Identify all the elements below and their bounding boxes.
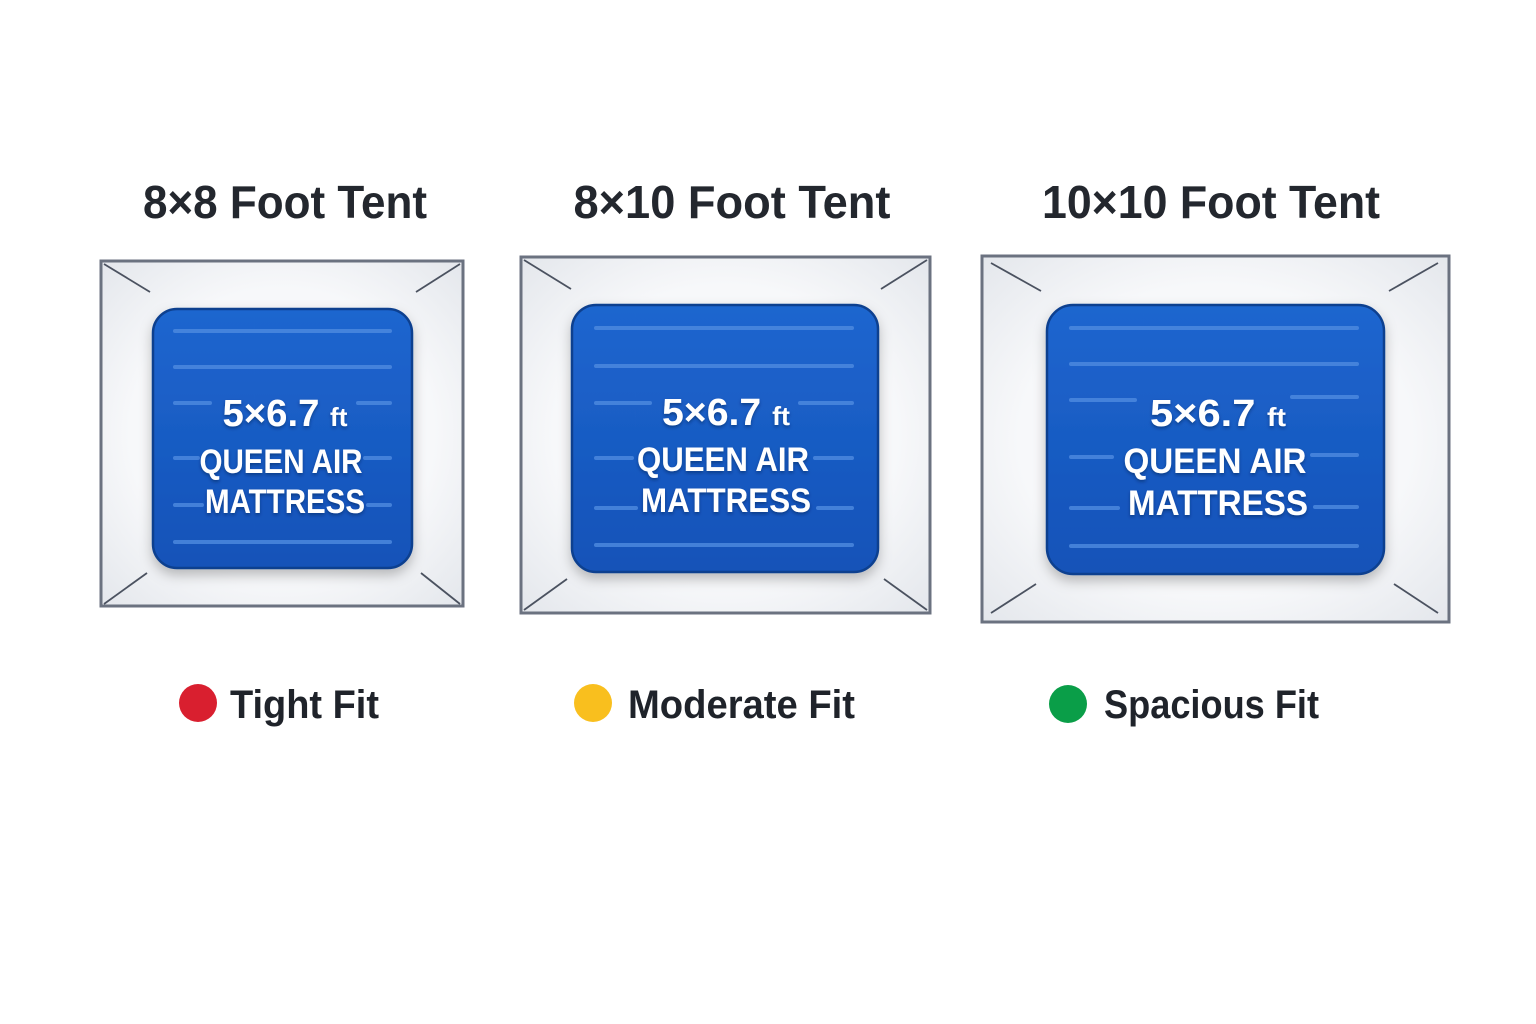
mattress bbox=[153, 309, 412, 568]
panel: 10x10 tent bbox=[982, 256, 1449, 622]
legend: spacious fit: Spacious Fit bbox=[1104, 683, 1319, 727]
legend: tight fit: Tight Fit bbox=[230, 683, 379, 727]
mattress: QUEEN AIR bbox=[637, 441, 809, 479]
mattress: MATTRESS bbox=[1128, 484, 1308, 523]
mattress: 5×6.7 ft bbox=[662, 392, 790, 434]
mattress: 5×6.7 ft bbox=[222, 393, 348, 435]
title: 10x10: 10×10 Foot Tent bbox=[1042, 176, 1380, 228]
title: 8x10: 8×10 Foot Tent bbox=[574, 176, 890, 228]
mattress: QUEEN AIR bbox=[200, 443, 362, 481]
legend: moderate fit: Moderate Fit bbox=[628, 683, 855, 727]
mattress: QUEEN AIR bbox=[1124, 442, 1306, 481]
title: 8x8: 8×8 Foot Tent bbox=[143, 176, 427, 228]
mattress: MATTRESS bbox=[205, 483, 365, 521]
mattress bbox=[1047, 305, 1384, 574]
mattress: 5×6.7 ft bbox=[1150, 393, 1286, 435]
mattress: MATTRESS bbox=[641, 482, 811, 520]
panel: 8x8 tent bbox=[101, 261, 463, 606]
panel: 8x10 tent bbox=[521, 257, 930, 613]
mattress bbox=[572, 305, 878, 572]
